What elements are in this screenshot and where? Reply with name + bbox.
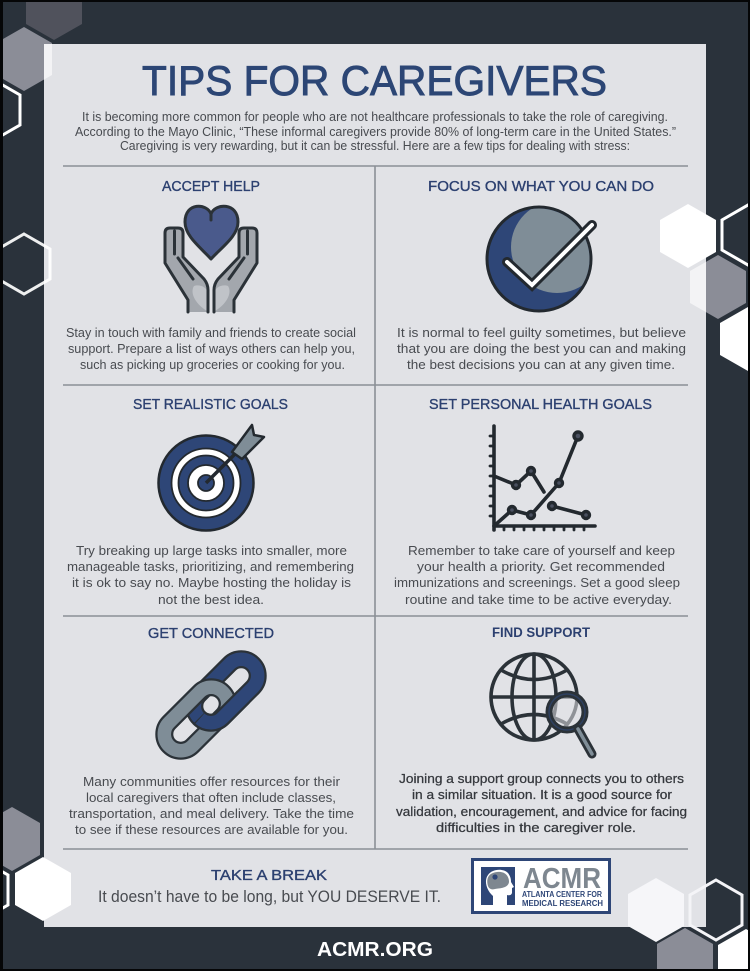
- heading: find support: FIND SUPPORT: [492, 624, 590, 640]
- body text: find support: Joining a support group connects you to others: [399, 772, 684, 786]
- footer url: ACMR.ORG: [317, 939, 433, 961]
- panel: accept help: [66, 178, 356, 372]
- body text: health goals: Remember to take care of yourself and keep: [408, 544, 675, 558]
- intro text: [75, 110, 676, 153]
- body text: health goals: [394, 544, 680, 607]
- callout: take a break: It doesn’t have to be long, but YOU DESERVE IT.: [98, 888, 441, 906]
- heading: focus: FOCUS ON WHAT YOU CAN DO: [428, 178, 654, 195]
- panel: get connected: [69, 625, 354, 837]
- body text: get connected: [69, 775, 354, 837]
- icon: line chart: [490, 426, 595, 530]
- body text: accept help: Stay in touch with family and friends to create social: [66, 326, 356, 340]
- body text: get connected: to see if these resources are available for you.: [75, 823, 348, 837]
- intro text: Caregiving is very rewarding, but it can be stressful. Here are a few tips for dealing with stress:: [120, 139, 630, 153]
- heading: realistic goals: SET REALISTIC GOALS: [133, 396, 288, 413]
- body text: get connected: Many communities offer resources for their: [83, 775, 340, 789]
- callout: take a break: [98, 867, 441, 906]
- body text: find support: [396, 772, 687, 835]
- heading: health goals: SET PERSONAL HEALTH GOALS: [429, 396, 652, 413]
- icon: check mark circle: [487, 201, 603, 311]
- body text: realistic goals: [67, 544, 354, 607]
- body text: health goals: routine and take time to be active everyday.: [405, 593, 672, 607]
- heading: accept help: ACCEPT HELP: [162, 178, 260, 195]
- logo: ACMR: ATLANTA CENTER FOR: [522, 890, 602, 899]
- icon: chain links: [157, 652, 265, 758]
- body text: accept help: [66, 326, 356, 372]
- body text: realistic goals: Try breaking up large tasks into smaller, more: [76, 544, 347, 558]
- body text: focus: the best decisions you can at any given time.: [407, 358, 675, 372]
- intro text: According to the Mayo Clinic, “These informal caregivers provide 80% of long-term care in the United States.”: [75, 125, 676, 139]
- title: TIPS FOR CAREGIVERS: [142, 57, 607, 104]
- body text: find support: difficulties in the caregiver role.: [436, 821, 636, 835]
- panel: set realistic goals: [67, 396, 354, 607]
- icon: target with arrow: [158, 425, 264, 530]
- body text: get connected: local caregivers that often include classes,: [86, 791, 336, 805]
- logo: ACMR: [472, 860, 610, 912]
- body text: find support: in a similar situation. It is a good source for: [412, 788, 672, 802]
- logo: ACMR: ACMR: [523, 863, 601, 895]
- heading: get connected: GET CONNECTED: [148, 625, 274, 642]
- body text: accept help: support. Prepare a list of ways others can help you,: [68, 342, 355, 356]
- panel: focus on what you can do: [397, 178, 686, 372]
- logo: ACMR: MEDICAL RESEARCH: [522, 899, 603, 908]
- body text: realistic goals: not the best idea.: [158, 593, 264, 607]
- panel: set personal health goals: [394, 396, 680, 607]
- logo icon: head silhouette: [481, 867, 515, 905]
- body text: realistic goals: it is ok to say no. Maybe hosting the holiday is: [72, 576, 351, 590]
- icon: hands holding heart: [165, 206, 257, 312]
- body text: focus: that you are doing the best you can and making: [397, 342, 686, 356]
- body text: find support: validation, encouragement, and advice for facing: [396, 805, 687, 819]
- panel: find support: [396, 624, 687, 835]
- body text: realistic goals: manageable tasks, prioritizing, and remembering: [67, 560, 354, 574]
- icon: globe with magnifier: [491, 654, 592, 754]
- body text: health goals: immunizations and screenings. Set a good sleep: [394, 576, 680, 590]
- intro text: It is becoming more common for people who are not healthcare professionals to take the role of caregiving.: [82, 110, 668, 124]
- body text: focus: It is normal to feel guilty sometimes, but believe: [397, 326, 686, 340]
- callout: take a break: TAKE A BREAK: [211, 867, 327, 884]
- body text: health goals: your health a priority. Get recommended: [417, 560, 665, 574]
- body text: focus: [397, 326, 686, 372]
- body text: get connected: transportation, and meal delivery. Take the time: [69, 807, 354, 821]
- body text: accept help: such as picking up groceries or cooking for you.: [80, 358, 345, 372]
